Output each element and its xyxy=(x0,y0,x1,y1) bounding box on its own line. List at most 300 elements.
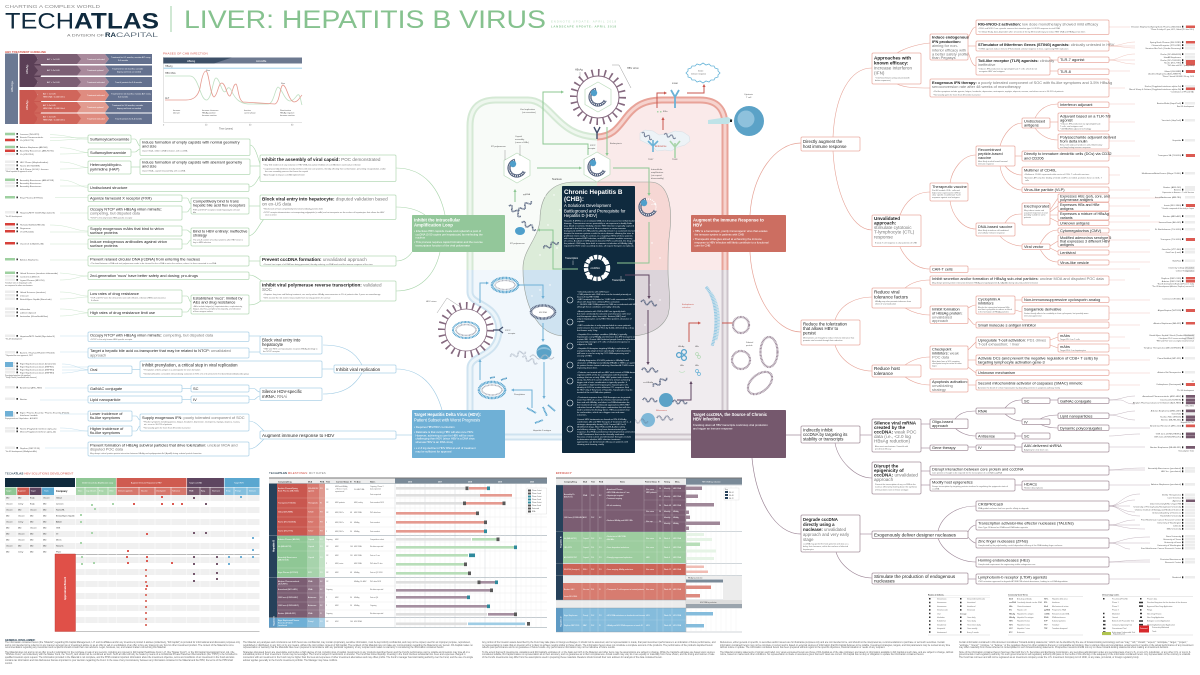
text: CHB bullets: that lowers only 1-log. xyxy=(577,329,598,332)
company lists: right purple tree: GeneTide xyxy=(1172,414,1182,416)
company lists: right red tree: IPI xyxy=(1192,381,1194,383)
table: TechAtlas milestones: Data at Q2 2018 xyxy=(370,571,382,574)
table: TechAtlas milestones: HBsAg xyxy=(354,571,359,574)
table: TechAtlas milestones: PO xyxy=(320,530,323,532)
company lists: right red tree: Bristol-Myers Squibb / Merck (Pembro/Nivolumab) xyxy=(1150,334,1194,337)
company lists: right red tree: Nabi/Vax xyxy=(1172,260,1182,262)
table: TechAtlas milestones: ROA xyxy=(320,480,325,484)
box: Electroporated: Electroporated xyxy=(1024,204,1049,208)
legend: clinical stage codes: Partnered xyxy=(1140,627,1147,630)
table: efficacy: RIG-I xyxy=(583,569,588,571)
text: CHB bullets: identified of drugs. Most FDA and ELA allow safety xyxy=(577,426,626,428)
text: CHB bullets: the treatment of 5-50 cell-based approaches (95% HBV xyxy=(577,404,630,406)
box: Activate DCs: targeting lymphocyte activation gene-3 xyxy=(978,360,1045,364)
table: TechAtlas milestones: Ongoing xyxy=(326,589,332,591)
text block: general disclaimer column 3: Any portion of the Investor assets described by the Fund may take place in foreign exchanges. It should not be assumed, and no representation is made, that past investment performance is an indication of future performance, and no representation is made that an investor will or is likely to achieve results similar to those shown. The information herein does not constitute a complete account of the products. The performance of the products depicted herein reflects past performance and is no guarantee of future results. Any performance information may not be indicative of future results. xyxy=(482,642,716,649)
legend: milestone key: Phase 3 end xyxy=(532,505,541,507)
table: HBV solutions development: Mid xyxy=(18,528,21,530)
label: intracellular amplification: disassembly) xyxy=(651,178,664,180)
box: Augment immune response to HDV xyxy=(260,431,396,439)
box: HEs: Homing endonucleases (HEs) xyxy=(978,558,1030,562)
box: Prevent rcDNA entering nucleus: Prevent relaxed circular DNA (rcDNA) from entering the nucleus xyxy=(90,256,200,262)
logo: TechAtlas: CAPITAL xyxy=(116,33,159,39)
company lists: right red tree: * Combination of IFN and NAs xyxy=(1170,90,1194,94)
table: efficacy: • Hepatocyte targeted xyxy=(606,494,623,497)
box: Checkpoint inhibitors: inhibitors: weak xyxy=(932,350,959,356)
icon: receptor TLR & innate immune burst: IFNα xyxy=(663,111,668,113)
company lists: right red tree: Roche (RO-7020531) xyxy=(1161,60,1181,62)
company lists: right purple tree: Duke University/UNC Chapel Hill xyxy=(1150,502,1182,506)
box: Reduce the tolerization: persist xyxy=(803,330,816,336)
box: Target hepatic bile acid co-transporter: Target a hepatic bile acid co-transporter that may be related to NTCP: unvalidated xyxy=(90,348,231,353)
table: TechAtlas milestones: No data expected xyxy=(370,545,383,548)
table: TechAtlas milestones: RIG-I/NOD2 xyxy=(308,488,318,490)
icon: HBV proteins: HBe xyxy=(680,365,685,367)
table: TechAtlas milestones: HBV, naive xyxy=(335,563,343,565)
table: efficacy: Eiger Biopharma xyxy=(564,615,577,617)
company lists: right purple tree: Suzhou Ribo (SR016) xyxy=(1160,416,1181,418)
box: Approaches with known efficacy xyxy=(872,53,921,84)
legend: commonly used terms: Anti-drug antibody xyxy=(1017,598,1032,600)
company lists: right purple tree: Arrowhead Research (ARC-520) xyxy=(1150,424,1181,428)
company lists: left blue tree: Eiger Biopharmaceuticals (EBP994) xyxy=(20,368,54,371)
legend: routes of delivery: Every 2 weeks xyxy=(967,632,979,634)
text: CHB bullets: and efficacy change. They have demonstrated great xyxy=(577,428,627,431)
box: LTβR agonists: Lymphotoxin-b receptor (LTbR) agonists xyxy=(978,574,1047,580)
title: LIVER: HEPATITIS B VIRUS xyxy=(184,6,546,34)
table: TechAtlas milestones: TLR-7 xyxy=(308,522,313,524)
legend: routes of delivery: Routes of delivery xyxy=(928,594,944,596)
company lists: right red tree: Benitec (ABX-203) xyxy=(1163,186,1181,189)
connectors: red tree xyxy=(833,27,1058,385)
company lists: right red tree: Roche (RO-6864018) xyxy=(1161,54,1181,56)
icon: NTCP receptor: (via secretion) xyxy=(522,111,536,114)
box: HDACs xyxy=(1022,481,1109,490)
table: efficacy xyxy=(556,471,742,632)
panel: Target Hepatitis Delta Virus: Target Hepatitis Delta Virus (HDV): xyxy=(414,412,481,417)
text: CHB bullets: and therapeutic data, liver cells. Serious (HBV) and xyxy=(577,315,626,318)
box: Lower incidence: flu-like symptoms xyxy=(90,415,120,420)
box: Disrupt interaction: Disrupt interaction between core protein and cccDNA xyxy=(932,466,1024,471)
table: HBV solutions development: Janssen xyxy=(56,504,63,506)
company lists: right red tree: Ascletis Biopharma (ASC-88MYH) xyxy=(1148,72,1181,76)
company lists: left green tree: telbivudine xyxy=(20,308,31,311)
box: Disrupt interaction: Core protein is thought to be required for the transcription of cccDNA to pgRNA xyxy=(932,472,1003,475)
panel: HBV treatment guideline: ALT < 2x ULN xyxy=(43,116,56,118)
box: Inhibit viral polymerase: SOC xyxy=(262,287,273,292)
text block: general disclaimer column 2 xyxy=(243,641,473,662)
box: Reduce host tolerance: tolerance xyxy=(874,371,893,376)
table: efficacy: ABI-H0731 xyxy=(564,496,573,498)
box: Reduce viral tolerance factors: Reduce viral xyxy=(874,290,900,294)
text: CHB bullets: although these conditions are highly clinically xyxy=(577,306,621,308)
table: efficacy: • Therapeutic T cell response in treated patients xyxy=(606,588,644,591)
table: HBV solutions development: Oncore xyxy=(6,510,13,512)
box: Directly augment the host immune response: Directly augment the xyxy=(803,139,843,144)
box: LTβR agonists xyxy=(976,574,1109,584)
table: TechAtlas milestones: HBV xyxy=(335,597,339,599)
box: CRISPR/Cas9: RNA guided nuclease that has specific affinity to degrade xyxy=(978,507,1029,510)
table: HBV solutions development: Mid xyxy=(30,534,33,536)
table: TechAtlas milestones: 96 xyxy=(350,605,352,607)
legend: clinical stage codes: New Drug Review xyxy=(1147,613,1162,615)
table: TechAtlas milestones: Vir (ABI-H0731) xyxy=(278,545,292,548)
text: CHB bullets: but most commonly for outcome and clearance with viral xyxy=(577,312,631,316)
table: HBV solutions development: TECHATLAS HBV SOLUTIONS DEVELOPMENT xyxy=(5,472,74,476)
panel: Target cccDNA xyxy=(691,410,786,458)
company lists: left blue tree: Ropeginterferon / Hepcludex + ALN-HDV xyxy=(5,417,39,420)
table: TechAtlas milestones: 2020 xyxy=(530,482,534,484)
table: TechAtlas milestones: Data readout xyxy=(370,530,380,533)
table: TechAtlas milestones: Trt Arm xyxy=(354,480,361,484)
icon: cccDNA: Transcription xyxy=(565,257,579,260)
box: Inhibit the assembly of viral capsid xyxy=(260,155,396,182)
company lists: left green tree: Hepatera/MYR GmbH (Myrcludex B) xyxy=(20,211,55,214)
box: SC: SC xyxy=(193,386,199,391)
chart: phases of CHB infection: Inactive xyxy=(244,109,252,112)
box: IV (gene therapy): IV xyxy=(978,445,982,450)
box: Therapeutic vaccine: Pre-NK models CD8+ cells and xyxy=(932,190,960,192)
panel: HBV treatment guideline: Treatment indicated xyxy=(87,58,105,61)
panel: HBV treatment guideline: 3-6 months xyxy=(118,59,128,62)
box: Low rates of drug resistance: 0 effects xyxy=(91,299,99,302)
table: efficacy: Hepatitis B xyxy=(560,536,562,548)
legend: commonly used terms: rcDNA xyxy=(1044,612,1050,615)
box: TALENs: Uses Type 1B based on DNA-base-DNA binder agonists xyxy=(978,526,1028,529)
legend: efficacy key: Wk 24 xyxy=(729,492,734,494)
table: TechAtlas milestones: Notes xyxy=(370,480,375,484)
legend: milestone key: Phase 2 start xyxy=(532,495,542,498)
box: Adjuvant based on TLR-7/8: T cells, viral antigens and xyxy=(1060,125,1083,128)
box: Reduce viral tolerance factors xyxy=(872,288,921,308)
legend: commonly used terms: Subviral particles xyxy=(1052,620,1066,623)
text: CHB bullets: Current HBV treatments are based on IFN & HBsAg xyxy=(577,418,627,421)
company lists: right red tree: University College of London xyxy=(1168,266,1194,270)
table: TechAtlas milestones: Ongoing xyxy=(370,605,376,607)
box: Approaches with known efficacy: • Interferon/innate acting anti-viral (with xyxy=(875,76,910,80)
company lists: left green tree: Assembly Biosciences xyxy=(20,185,41,188)
box: Degrade cccDNA: nuclease: unvalidated xyxy=(803,527,847,532)
table: TechAtlas milestones: Roche (RG-7795) xyxy=(278,530,293,532)
box: Disrupt the epigenicity: approach xyxy=(874,477,894,482)
icon: NTCP receptor: Endocytosis xyxy=(610,142,623,145)
box: Induce endogenous IFN xyxy=(930,34,969,60)
table: HBV solutions development: Mid xyxy=(43,552,46,554)
table: TechAtlas milestones: HBV, NUCs xyxy=(335,531,344,533)
box: Occupy NTCP (green): competing, but disputed data xyxy=(90,210,141,216)
text: CHB bullets: • Infected patients with CHB have: xyxy=(577,290,610,294)
text: CHB intro: background. A 90% of CHB patients globally remain in a sustained viral activity xyxy=(564,230,639,232)
table: HBV solutions development: Prenyl. xyxy=(235,490,241,492)
table: TechAtlas milestones: PO xyxy=(320,522,323,524)
company lists: right red tree: Arbutus BioTherapeutics xyxy=(1158,371,1181,374)
box: Supply exogenous mAbs: surface proteins xyxy=(90,230,118,235)
panel: HBV treatment guideline: HBV TREATMENT GUIDELINE xyxy=(5,50,46,54)
box: Unvalidated approach CTL: Unvalidated xyxy=(874,216,900,221)
legend: efficacy key: Wk 48 xyxy=(729,495,734,497)
table: TechAtlas milestones: 2 xyxy=(326,605,327,607)
text: CHB bullets: • Patients are treated with an HBV viral current of RNAi-based xyxy=(577,371,637,374)
box: Unknown antigens: Unknown antigens xyxy=(1060,221,1090,225)
legend: commonly used terms: Hepatic cell xyxy=(1017,609,1027,612)
box: ZFNs: Complicated by the polyclonality; careful dependent efficacy of the DNA binding finger nuclease xyxy=(978,544,1063,547)
company lists: right purple tree: Sana University xyxy=(1166,535,1182,538)
panel: Target Hepatitis Delta Virus: Patient Subset with Worst Prognosis xyxy=(414,418,480,422)
label: intracellular amplification xyxy=(651,168,664,180)
chart: phases of CHB infection: Flare xyxy=(206,70,210,72)
text: CHB intro: required for HDV virion assembly to date, all require therapies to replicate. xyxy=(564,244,635,248)
box: Inhibit formation of HBsAg: Inhibit formation xyxy=(932,306,960,312)
box: Inhibit the assembly of viral capsid: Inhibit the assembly of viral capsid: POC demonstrated xyxy=(262,157,381,162)
box: IV: IV xyxy=(193,397,197,402)
table: HBV solutions development: Trials xyxy=(44,490,49,492)
table: TechAtlas milestones: GSK Ionis (IONIS-HBVL) xyxy=(278,605,299,607)
company lists: left blue tree: Benitec xyxy=(20,398,28,401)
box: Stimulate endogenous nucleases xyxy=(872,573,968,584)
legend: commonly used terms: SVP xyxy=(1044,621,1048,623)
icon: HBV mRNA, ribosomes: cccHBsAg xyxy=(643,381,654,384)
company lists: right purple tree: HBV Inc. (preclinical) xyxy=(1161,471,1181,473)
box: Reduce the tolerization: Mechanisms are thought to reduce immune tolerance that xyxy=(803,336,855,340)
box: Upregulate T cell activation: Upregulate T-cell activation: PD1 drives xyxy=(978,338,1046,342)
box: TLR-7 agonist xyxy=(1058,57,1109,62)
chart: phases of CHB infection: ALT xyxy=(165,97,170,100)
connectors: blue tree xyxy=(132,336,442,449)
box: Disrupt the epigenicity: nucleus; effectively shutting down the synthesis xyxy=(875,486,917,488)
company lists: right red tree: Checkpoint PD-1 human oncology / Phase 1 xyxy=(1159,337,1194,340)
table: HBV solutions development: Immune xyxy=(249,490,256,492)
table: TechAtlas milestones: Transgene (TG1050) xyxy=(278,502,296,504)
company lists: right red tree: St. Bartholomew (TG-1050) xyxy=(1155,228,1181,231)
table: efficacy: Ph2 xyxy=(591,569,594,571)
table: HBV solutions development: Other xyxy=(109,490,114,492)
text: CHB bullets: for patient factors toward reducing. Baseline ALT HBV tissue xyxy=(577,364,635,367)
arrows: immune (red) xyxy=(657,85,735,342)
table: TechAtlas milestones: Ph1 data 2018 xyxy=(370,580,381,583)
box: Modify host epigenetics: Modify host epigenetics xyxy=(932,480,973,484)
box: Degrade cccDNA: cccDNA may permit the host genome and also as a xyxy=(803,542,849,546)
icon: endosome with TLR7/TLR8: TLR7 xyxy=(648,159,654,161)
table: HBV solutions development: Nuclease xyxy=(212,490,220,492)
table: TechAtlas milestones: 48 xyxy=(350,572,352,574)
box: Silence viral mRNA: HBsAg reduction) xyxy=(874,438,910,444)
table: TechAtlas milestones: Antisense xyxy=(308,604,316,607)
company lists: left green tree: Enyo Pharma (EYP001) xyxy=(20,197,43,199)
text block: general disclaimer column 4: The Material contains statements of opinion and belief. Any views expressed herein are those of RA Capital as of the date indicated, are based on information available to RA Capital at such date, and are subject to change, without notice, based on market and other conditions. No representation is made or assurance given that such views are correct. RA Capital has no duty or obligation to update the information contained herein. xyxy=(720,652,953,656)
table: efficacy: • HBsAg and HDV RNA responses at week 48 xyxy=(606,624,643,627)
box: Disrupt the epigenicity: of the proteins seen in these serotype xyxy=(875,488,909,492)
table: HBV solutions development: Oncore xyxy=(6,546,13,548)
box: Unknown antigens xyxy=(1058,220,1109,226)
company lists: left blue tree: Eiger Biopharmaceuticals (EBP883) xyxy=(20,371,54,374)
company lists: right red tree: Hepatitis xyxy=(1173,139,1181,142)
panel: Chronic Hepatitis B (CHB) xyxy=(562,186,640,453)
company lists: right red tree: Transgene SA (TG1050) xyxy=(1158,154,1181,157)
table: HBV solutions development: Mid xyxy=(30,546,33,548)
box: Therapeutic vaccine: response against viral antigens xyxy=(932,196,960,199)
box: Antisense: Antisense xyxy=(978,434,995,438)
box: VLP: Virus-like particle (VLP) xyxy=(1024,187,1065,192)
table: TechAtlas milestones: 2019 xyxy=(498,482,502,484)
box: Inhibit viral polymerase xyxy=(260,281,396,301)
table: TechAtlas milestones: Gilead (GS-9688) xyxy=(278,512,293,514)
box: Supply exogenous IFN: • Flu-like symptoms including pyrexia, fatigue, headache, depression, neutropenia, myalgia, alopecia, nausea, xyxy=(143,420,241,424)
box: mAbs 2: mAbs xyxy=(1060,344,1070,349)
box: Unvalidated approach CTL: approach: xyxy=(874,220,897,226)
box: Unvalidated approach CTL: T-lymphocyte (CTL) xyxy=(874,230,915,234)
box: Checkpoint inhibitors xyxy=(930,346,968,369)
box: Prevent formation of HBsAg subviral particles (blue) xyxy=(88,442,249,456)
box: Block viral entry (green) xyxy=(260,195,396,220)
box: Undisclosed structure xyxy=(88,184,249,192)
icon: cytotoxic T cell xyxy=(708,93,764,136)
panel: HBV treatment guideline: Treatment indicated xyxy=(87,81,105,84)
box: RIG-I/NOD-2: • In Gilead Study, dose-dependent after 12 weeks of 25 mg SB monotherapy to reduce HBV DNA and HBsAg at low titers xyxy=(978,30,1085,34)
legend: milestone key: Phase 3 start xyxy=(532,501,542,504)
company lists: right red tree: Prima BioMed (IMP-321) xyxy=(1157,358,1181,360)
table: HBV solutions development: Vaccine xyxy=(141,490,148,492)
box: Low rates of drug resistance xyxy=(88,290,182,303)
table: efficacy: Nuc naive xyxy=(646,511,654,513)
arrow segments over dark panel xyxy=(562,263,640,275)
box: Undisclosed antigens: antigens xyxy=(1024,122,1039,128)
table: TechAtlas milestones: Current Status xyxy=(336,480,349,484)
box: Lower incidence: Lower incidence of xyxy=(90,411,123,416)
company lists: right red tree: Debiopharm (Xevinapant) xyxy=(1157,383,1181,386)
company lists: right purple tree: University of Texas xyxy=(1163,538,1181,541)
icon: HDV virion: receptor xyxy=(508,332,516,335)
box: Multimer of CD40L: cells xyxy=(1025,180,1029,182)
table: TechAtlas milestones: No data expected xyxy=(370,588,383,591)
legend: commonly used terms: HBV xyxy=(1009,621,1014,623)
text: CHB bullets: • Hepatitis B is virologic condition (HBsAg+), typically xyxy=(577,333,628,336)
box: Prevent cccDNA formation xyxy=(260,256,396,266)
icon: rcDNA in nucleus: rcDNA xyxy=(651,203,657,206)
panel: HBV treatment guideline xyxy=(5,50,152,124)
company lists: left green tree: Vir (VIR-2779) xyxy=(20,140,34,142)
company lists: left blue tree: Roche (Pegylated interferon alpha-2a) xyxy=(20,427,57,430)
legend: commonly used terms: Mechanism of action xyxy=(1052,605,1068,608)
chart: phases of CHB infection: 0 xyxy=(163,124,165,126)
table: efficacy: RNAi xyxy=(583,494,588,497)
box: Competitively bind xyxy=(191,198,249,214)
box: Established nucs: AEs and drug resistance xyxy=(193,300,235,304)
box: Induce endogenous antibodies xyxy=(88,239,182,249)
panel: Target Hepatitis Delta Virus: • Requires HBV/HDV co-infection xyxy=(414,425,455,429)
table: TechAtlas milestones: HBsAg, DL-HBV xyxy=(354,580,367,583)
table: TechAtlas milestones: 1/2 xyxy=(326,572,328,574)
box: Lentiviral: Lentiviral xyxy=(1060,250,1076,255)
legend: milestone key: Data read xyxy=(532,507,539,510)
icon: HBV proteins: HBx xyxy=(695,346,699,348)
box: Sangamide: Sangamide derivative xyxy=(1024,306,1061,312)
table: HBV solutions development: Cmny xyxy=(18,552,23,554)
box: Exogenous IFN therapy: • Flu-like symptoms include pyrexia, fatigue, headache, depression, neutropenia, myalgia, alopecia, nausea, and others occur in 30-70% of patients xyxy=(933,90,1063,93)
box: Polysaccharide adjuvant: Polysaccharide adjuvant derived xyxy=(1060,134,1116,140)
table: HBV solutions development: Roche/BL xyxy=(56,510,66,512)
heading: CHB: A Solutions Development xyxy=(564,203,612,208)
text: CHB bullets: only in hepatocytes carry HBV. Most patients clearance of xyxy=(577,318,632,320)
box: Adjuvant based on TLR-7/8: • Induces IFN production via signaling/elevate xyxy=(1060,122,1101,126)
box: Apoptosis activation xyxy=(930,379,968,392)
box: Supply exogenous mAbs: Supply exogenous mAbs that bind to virion xyxy=(90,226,164,231)
box: Inhibit prenylation: Inhibit prenylation, a critical step in viral replication xyxy=(142,362,238,368)
company lists: right purple tree: Roadsink xyxy=(1172,577,1182,579)
table: efficacy: Nuc naive xyxy=(646,538,654,540)
box: Prevent formation of HBsAg subviral particles (blue): May disrupt critical protein-protein interaction between HBsAg and apolipoprotein A-I (ApoAI) during subviral particle formation xyxy=(90,452,202,455)
text: CHB bullets: more than 90% of a cure for chronic intervention of the xyxy=(577,398,629,402)
table: efficacy: Monthly xyxy=(664,487,670,490)
chart: phases of CHB infection: HBsAg positive xyxy=(202,112,216,114)
box: Approaches with known efficacy: increase interferon xyxy=(874,66,912,70)
box: Apoptosis activation: Apoptosis activation: xyxy=(932,379,968,384)
table: TechAtlas milestones: (ABI-H2158) xyxy=(278,558,289,562)
icon: pgRNA strands xyxy=(508,193,559,250)
box: Inhibit secretion: Inhibit secretion and/or formation of HBsAg sub-viral particles: unclear MOA and disputed POC data xyxy=(932,276,1105,281)
legend: commonly used terms: cccDNA xyxy=(1009,601,1017,604)
box: TLR agonists: recognize HBV viral antigens xyxy=(979,70,1005,73)
table: TechAtlas milestones: (ALN-HBV) xyxy=(278,582,288,586)
table: efficacy: Ph2 xyxy=(591,495,594,497)
text: CHB bullets: and generally adapt at least specifically. Cleared patients xyxy=(577,350,631,352)
legend: commonly used terms: HBeAg xyxy=(1009,616,1015,619)
logo: TechAtlas xyxy=(5,4,159,39)
text block: general disclaimer column 1: The Material does not and is not an offer to sell or solicitation for the purchase or sale of any security, including any interest in RA Capital Healthcare Fund, L.P. (the "Master Fund"), or the RA Capital International Fund, Ltd. (the "Offshore Fund," and collectively with the Master Fund, the "Fund"), and should not be construed as such. Such an offer will only be made by means of a confidential Private Placement Memorandum (the "PPM") to be furnished to qualified investors upon request. The information provided in the Material is not complete, and the PPM contains important information about the investment objective, terms and conditions of an investment in the Fund and also contains tax information and risk disclosures that are important to your decision regarding the Fund. In the case of any inconsistency between any information contained in the Material and the PPM, the terms of the PPM shall control. xyxy=(5,652,237,665)
chart: phases of CHB infection: 20 xyxy=(205,124,208,126)
table: TechAtlas milestones: Benitec (BB-HB-331) xyxy=(278,612,296,615)
table: efficacy: HDV RNA xyxy=(673,614,682,617)
company lists: left blue tree: Eiger / Pharma Essentia / Pharma Essentia (P1101) xyxy=(20,412,70,414)
box: TALENs: Transcription activator-like effector nucleases (TALENs) xyxy=(978,520,1074,526)
box: mixture HBsAg: variants xyxy=(1060,216,1073,220)
legend: commonly used terms: MoA xyxy=(1044,605,1049,608)
icon: capsid hexagon left: (cores of HBc) xyxy=(515,141,529,144)
box: Degrade cccDNA xyxy=(801,515,860,552)
table: efficacy: HBsAg xyxy=(673,510,679,513)
logo: TechAtlas: ATLAS xyxy=(74,8,159,34)
table: efficacy: HBV DNA xyxy=(673,588,682,591)
gantt bars: milestones xyxy=(396,486,530,626)
company lists: left green tree: * Most hepatitis B approach active xyxy=(5,170,32,173)
table: HBV solutions development: Mid xyxy=(30,552,33,554)
box: Silence HDV-specific mRNA: mRNA: RNAi xyxy=(262,394,287,399)
box: Occupy NTCP (green): Occupy NTCP with HBsAg virion mimetic: xyxy=(90,206,162,212)
table: efficacy: IV xyxy=(599,589,601,591)
table: HBV solutions development: Oncore xyxy=(6,504,13,506)
box: HBs and HBe: antigens xyxy=(1060,207,1074,211)
table: efficacy: SC xyxy=(599,517,602,519)
icon: endosome with TLR7/TLR8: TLR8 xyxy=(672,159,678,161)
table: HBV solutions development: Novartis xyxy=(56,544,63,548)
company lists: left green tree: ContraVir (CMX157) xyxy=(20,275,40,278)
table: TechAtlas milestones: HBsAg xyxy=(354,596,359,599)
box: ZFNs: Zinc finger nucleases (ZFNs) xyxy=(978,538,1029,544)
box: Established nucs xyxy=(191,295,249,314)
table: TechAtlas milestones: 2018 xyxy=(468,482,472,484)
table: efficacy: HBV DNA xyxy=(673,537,682,540)
table: TechAtlas milestones: TLR-7 xyxy=(308,530,313,532)
box: Induce endogenous IFN: inferior efficacy with xyxy=(932,47,966,52)
table: TechAtlas milestones: 40 xyxy=(350,522,352,524)
box: empty capsids aberrant geometry: Induce formation of empty capsids with aberrant geometry xyxy=(142,160,242,164)
box: Recombinant peptide-based vaccine: immune response xyxy=(978,164,995,166)
box: Oligo-based approach: approach xyxy=(932,423,948,428)
box: Oligo-based approach xyxy=(930,419,968,428)
box: Reduce the tolerization: promote viral survival through their reduction xyxy=(803,339,842,342)
box: Supply exogenous mAbs xyxy=(88,226,182,236)
box: HBs and HBe xyxy=(1058,202,1109,211)
heading: CHB: Battleground and Prerequisite for xyxy=(564,208,626,214)
